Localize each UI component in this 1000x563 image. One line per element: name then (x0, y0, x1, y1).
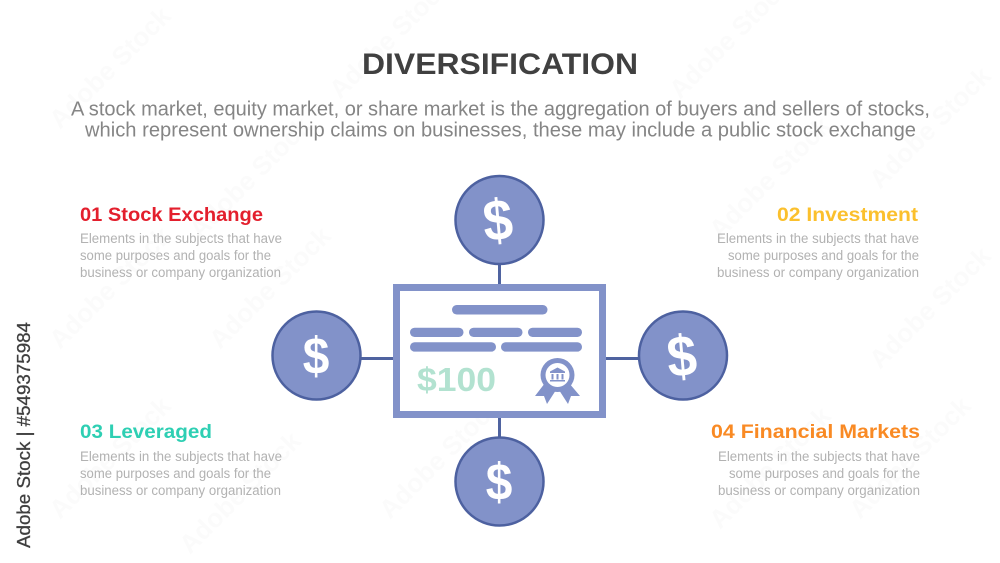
text block: 04 description: business or company organization (718, 483, 920, 498)
panel: 03 Leveraged (80, 422, 282, 498)
stock id side label: Adobe Stock | #549375984 (13, 322, 34, 548)
cheque text lines (410, 305, 582, 352)
text block: 03 description: Elements in the subjects that have (80, 449, 282, 464)
text block: 03 description (80, 449, 282, 498)
icon: dollar circle top (456, 176, 544, 264)
panel: 04 Financial Markets (711, 422, 920, 498)
panel: bank cheque (396, 288, 602, 414)
icon: dollar circle left (272, 312, 360, 400)
heading: 01 Stock Exchange: 01 Stock Exchange (80, 205, 263, 226)
title: DIVERSIFICATION (362, 48, 638, 81)
text: Adobe Stock (843, 390, 977, 524)
text block: 04 description: Elements in the subjects that have (718, 449, 920, 464)
panel: 01 Stock Exchange (80, 205, 282, 280)
heading: 04 Financial Markets: 04 Financial Markets (711, 422, 920, 443)
text block: 04 description: some purposes and goals for the (729, 466, 920, 481)
text block: 01 description: Elements in the subjects that have (80, 231, 282, 246)
icon: dollar circle right: $ (664, 323, 699, 390)
text block: 02 description: some purposes and goals for the (728, 248, 919, 263)
text block: 04 description (718, 449, 920, 498)
icon: dollar circle bottom: $ (486, 453, 513, 511)
text: Adobe Stock (43, 0, 177, 134)
text block: 01 description (80, 231, 282, 280)
icon: dollar circle right (639, 312, 727, 400)
text: Adobe Stock (863, 60, 997, 194)
icon: bank seal badge (535, 358, 580, 404)
text block: 01 description: business or company organization (80, 265, 281, 280)
icon: dollar circle left: $ (303, 327, 330, 385)
text: Adobe Stock (183, 110, 317, 244)
text block: 02 description (717, 231, 919, 280)
text: Adobe Stock (173, 425, 307, 559)
heading: 02 Investment: 02 Investment (777, 205, 919, 226)
subtitle text: A stock market, equity market, or share market is the aggregation of buyers and sellers of stocks, (71, 98, 930, 120)
text: Adobe Stock (43, 390, 177, 524)
cheque amount: $100 (417, 361, 496, 398)
text: Adobe Stock (43, 220, 177, 354)
text: Adobe Stock (703, 400, 837, 534)
icon: dollar circle bottom (456, 438, 544, 526)
text block: 02 description: Elements in the subjects that have (717, 231, 919, 246)
text block: 03 description: business or company organization (80, 483, 281, 498)
subtitle text: which represent ownership claims on businesses, these may include a public stock exchange (84, 120, 916, 142)
text: Adobe Stock (203, 220, 337, 354)
heading: 03 Leveraged: 03 Leveraged (80, 422, 212, 443)
icon: dollar circle top: $ (480, 187, 515, 254)
subtitle text (71, 98, 930, 142)
panel: 02 Investment (717, 205, 919, 280)
text: Adobe Stock (863, 240, 997, 374)
text block: 03 description: some purposes and goals for the (80, 466, 271, 481)
text: Adobe Stock (703, 110, 837, 244)
text block: 01 description: some purposes and goals for the (80, 248, 271, 263)
text block: 02 description: business or company organization (717, 265, 919, 280)
text: Adobe Stock (373, 390, 507, 524)
connector lines (361, 264, 639, 438)
